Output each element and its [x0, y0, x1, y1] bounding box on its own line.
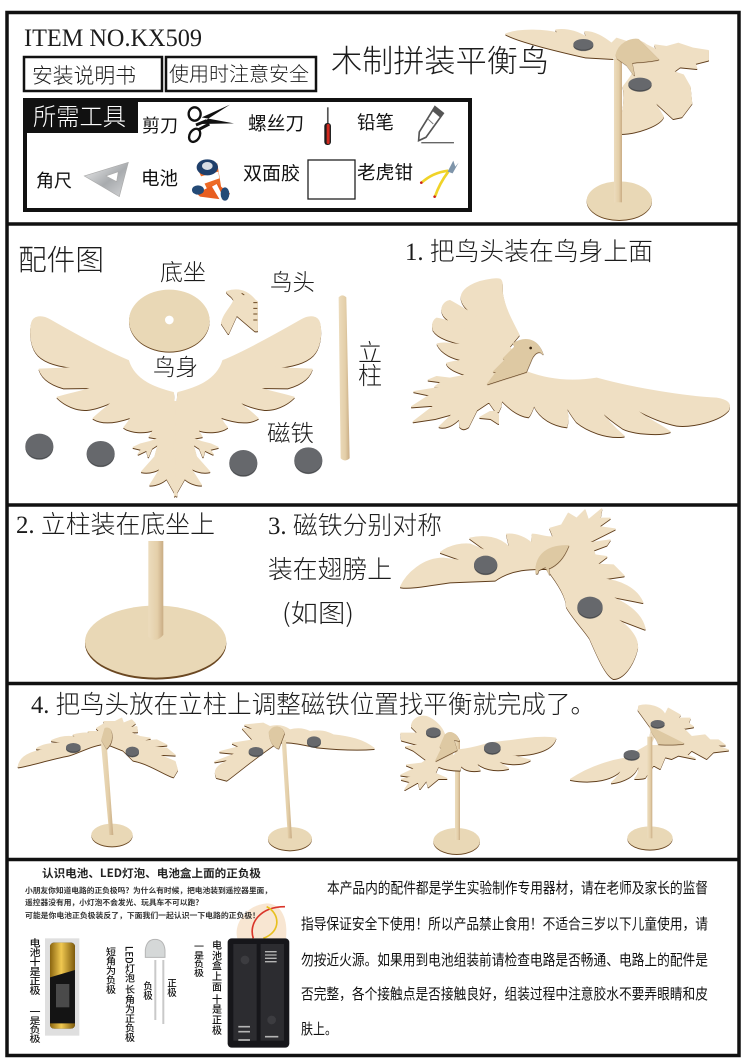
label: base: 底坐 — [160, 253, 206, 287]
tool label: set square: 角尺 — [36, 167, 72, 193]
panel: step 4 — [18, 691, 728, 854]
label: safety note: 使用时注意安全 — [169, 58, 309, 87]
label: assembly manual: 安装说明书 — [32, 60, 136, 90]
label: assembly manual — [24, 57, 162, 91]
icon: screwdriver — [324, 107, 331, 145]
photo: balance view D — [571, 705, 728, 850]
panel: parts diagram — [18, 237, 382, 496]
polarity intro text — [25, 885, 272, 921]
tool label: screwdriver: 螺丝刀 — [248, 110, 304, 136]
photo: AA battery — [45, 938, 79, 1036]
label: post: 立 — [358, 333, 382, 368]
LED labels — [104, 946, 179, 1043]
icon: set square — [84, 162, 128, 197]
heading: parts: 配件图 — [18, 237, 104, 279]
tools heading: 所需工具 — [33, 97, 126, 132]
battery polarity labels: 电池十是正极 — [27, 938, 43, 996]
part: magnets — [25, 434, 322, 475]
step 3 text: (如图) — [282, 594, 354, 630]
part: bird head — [222, 290, 257, 333]
part: base disc — [129, 290, 210, 352]
LED labels: 短角为负极 — [104, 946, 118, 995]
label: post: 柱 — [358, 356, 382, 391]
photo: LED bulb — [145, 939, 165, 1024]
label: body: 鸟身 — [153, 348, 198, 382]
battery polarity labels: 一是负极 — [27, 1007, 43, 1044]
step 1 text: 1. 把鸟头装在鸟身上面 — [405, 238, 653, 266]
LED labels: 负极 — [141, 980, 155, 1001]
photo: battery holder — [228, 903, 289, 1048]
battery holder labels: 电池盒上面 十是正极 — [210, 939, 224, 1036]
step 3 text — [268, 512, 442, 630]
step 3 text: 3. 磁铁分别对称 — [268, 512, 442, 540]
part: bird body — [31, 317, 321, 496]
LED labels: LED灯泡 长角为正负极 — [122, 946, 138, 1043]
polarity intro text: 小朋友你知道电路的正负极吗？为什么有时候，把电池装到遥控器里面， — [25, 885, 272, 896]
tool label: pencil: 铅笔 — [357, 109, 394, 135]
icon: batteries — [192, 159, 230, 201]
tools box — [25, 97, 470, 210]
photo: magnets on wings — [401, 509, 645, 678]
panel: header and tools — [24, 25, 708, 220]
panel: safety notice — [301, 877, 708, 1039]
panel: polarity guide — [25, 865, 289, 1048]
battery polarity labels — [27, 938, 43, 1044]
icon: tape square — [308, 160, 355, 199]
parts photo — [25, 290, 350, 496]
photo: balance view A — [18, 718, 177, 846]
panel: safety notice: 肤上。 — [301, 1018, 337, 1039]
item number: ITEM NO.KX509 — [24, 25, 202, 52]
photo: balance view C — [401, 716, 556, 854]
tool label: scissors: 剪刀 — [142, 112, 178, 138]
LED labels: 正极 — [165, 978, 179, 998]
panel: step 1 — [405, 238, 729, 436]
part: wooden post — [339, 295, 350, 460]
polarity intro text: 遥控器没有用，小灯泡不会发光、玩具车不可以跑？ — [25, 897, 203, 908]
label: magnets: 磁铁 — [267, 414, 314, 448]
panel: step 3 — [268, 509, 645, 678]
photo: post on base — [85, 541, 226, 678]
label: post — [358, 333, 382, 391]
battery holder labels — [192, 939, 224, 1036]
label: head: 鸟头 — [270, 263, 315, 297]
battery holder labels: 一是负极 — [192, 942, 206, 978]
photo: balance view B — [215, 723, 374, 850]
polarity title: 认识电池、LED灯泡、电池盒上面的正负极 — [42, 865, 261, 881]
photo: head on body — [412, 279, 729, 436]
icon: pliers — [420, 161, 459, 198]
polarity intro text: 可能是你电池正负极装反了，下面我们一起认识一下电路的正负极！ — [25, 910, 260, 921]
step 4 text: 4. 把鸟头放在立柱上调整磁铁位置找平衡就完成了。 — [31, 691, 595, 719]
icon: pencil — [419, 107, 454, 143]
photo: finished balance bird — [506, 30, 708, 220]
step 3 text: 装在翅膀上 — [268, 550, 392, 586]
tool label: battery: 电池 — [141, 165, 178, 191]
tool label: double-sided tape: 双面胶 — [243, 160, 300, 186]
panel: step 2 — [16, 511, 226, 678]
title: 木制拼装平衡鸟 — [331, 36, 549, 81]
icon: scissors — [187, 105, 234, 144]
tool label: pliers: 老虎钳 — [357, 159, 413, 185]
step 2 text: 2. 立柱装在底坐上 — [16, 511, 215, 539]
